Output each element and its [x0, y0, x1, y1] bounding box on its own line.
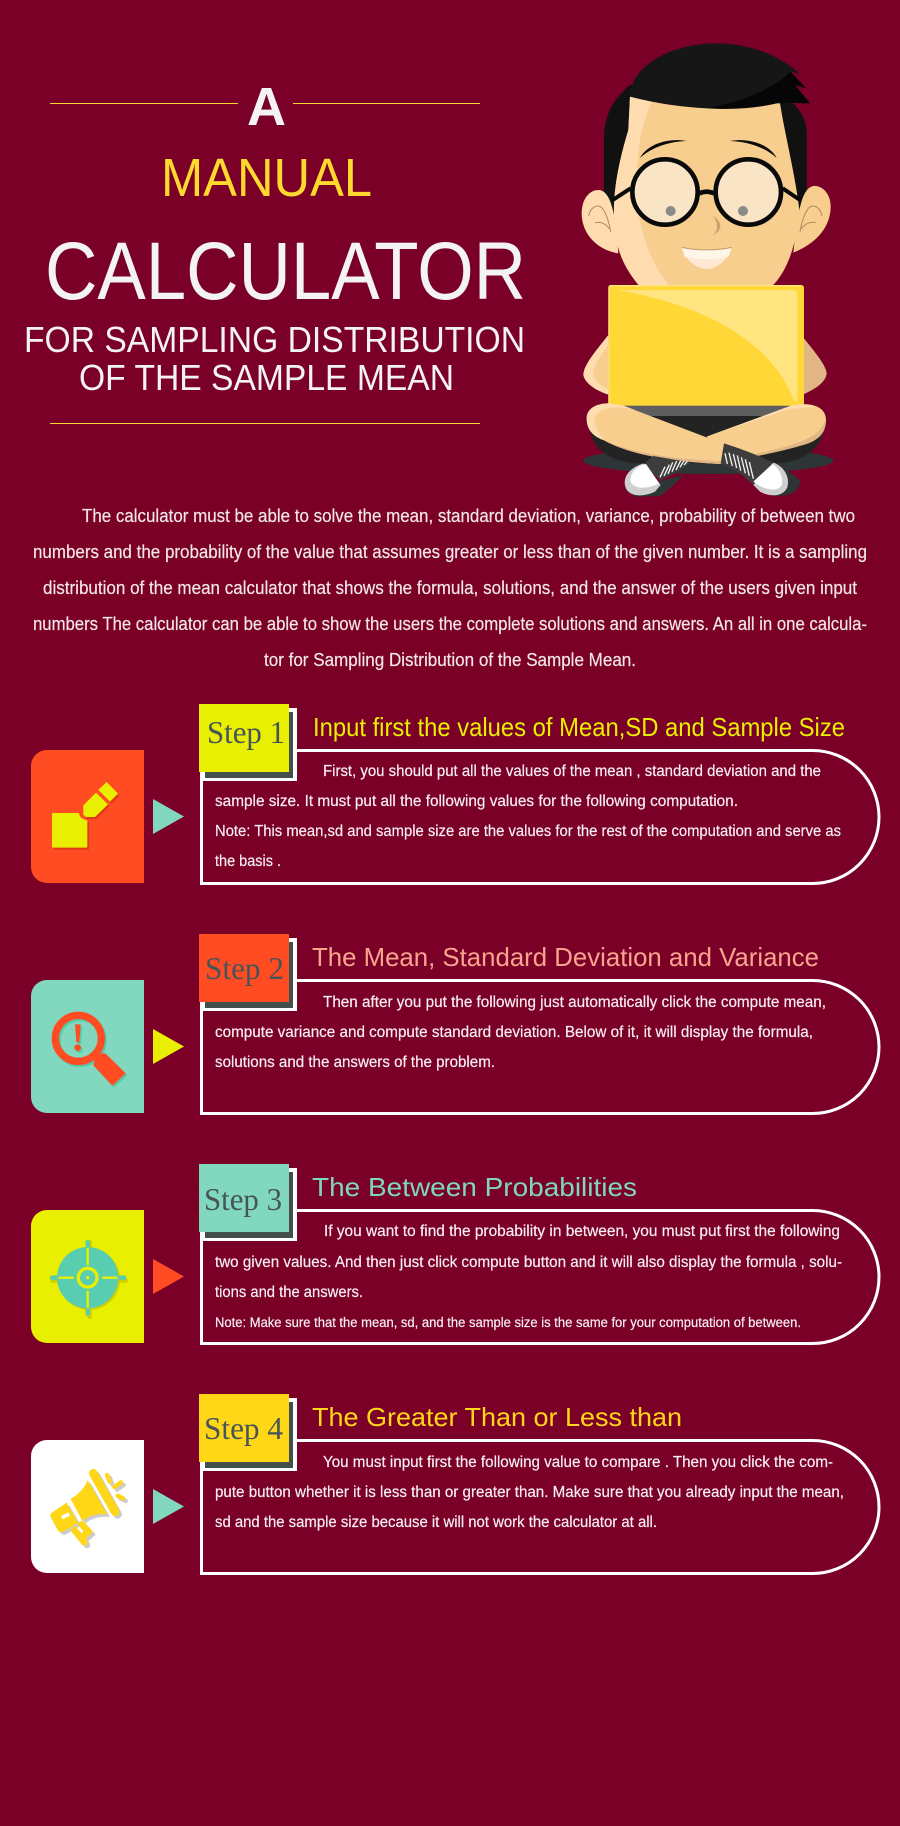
step 1 body text: the basis . — [215, 853, 281, 870]
intro paragraph — [33, 506, 867, 670]
arrow — [153, 799, 184, 834]
intro paragraph: numbers and the probability of the value that assumes greater or less than of the given number. It is a sampling — [33, 542, 867, 562]
step 2 heading: The Mean, Standard Deviation and Variance — [312, 942, 819, 972]
header title block — [24, 77, 526, 424]
step 3 icon card: target — [31, 1210, 144, 1343]
arrow — [153, 1259, 184, 1294]
text frame — [202, 1440, 879, 1574]
step 3 body text: If you want to find the probability in between, you must put first the following — [324, 1223, 840, 1240]
step 4 panel — [31, 1394, 879, 1574]
arrow — [153, 1489, 184, 1524]
step 4 body text: You must input first the following value to compare . Then you click the com- — [323, 1454, 833, 1471]
step 3 panel — [31, 1164, 879, 1344]
step 1 badge — [199, 704, 289, 772]
step 1 body text: Note: This mean,sd and sample size are the values for the rest of the computation and serve as — [215, 823, 841, 840]
step 1 body text: First, you should put all the values of the mean , standard deviation and the — [323, 763, 821, 780]
step 2 badge — [199, 934, 289, 1002]
step 4 heading: The Greater Than or Less than — [312, 1402, 682, 1432]
step 2 body text: solutions and the answers of the problem. — [215, 1054, 495, 1071]
step 2 body text: compute variance and compute standard deviation. Below of it, it will display the formula, — [215, 1024, 813, 1041]
arrow — [153, 1029, 184, 1064]
intro paragraph: tor for Sampling Distribution of the Sample Mean. — [264, 650, 636, 670]
step 1 heading: Input first the values of Mean,SD and Sample Size — [313, 712, 845, 742]
step 4 badge: Step 4 — [204, 1410, 283, 1446]
step 3 badge: Step 3 — [204, 1181, 282, 1217]
intro paragraph: distribution of the mean calculator that shows the formula, solutions, and the answer of the users given input — [43, 578, 857, 598]
title: MANUAL: MANUAL — [161, 148, 372, 208]
text frame — [202, 980, 879, 1114]
character: boy with glasses and laptop — [582, 43, 833, 497]
title: A: A — [247, 77, 286, 137]
step 2 body text — [215, 994, 826, 1071]
step 3 heading: The Between Probabilities — [312, 1172, 637, 1202]
step 1 panel — [31, 704, 879, 884]
subtitle line 2: OF THE SAMPLE MEAN — [79, 357, 454, 398]
step 4 body text: sd and the sample size because it will not work the calculator at all. — [215, 1514, 657, 1531]
step 2 panel — [31, 934, 879, 1114]
step 4 body text: pute button whether it is less than or greater than. Make sure that you already input the mean, — [215, 1484, 844, 1501]
step 3 badge — [199, 1164, 289, 1232]
text frame — [202, 1210, 879, 1344]
step 2 icon card: magnifier — [31, 980, 144, 1113]
step 3 body text: tions and the answers. — [215, 1284, 363, 1301]
intro paragraph: The calculator must be able to solve the mean, standard deviation, variance, probability of between two — [82, 506, 855, 526]
text frame — [202, 750, 879, 884]
step 1 body text — [215, 763, 841, 870]
step 2 body text: Then after you put the following just automatically click the compute mean, — [323, 994, 826, 1011]
step 1 body text: sample size. It must put all the following values for the following computation. — [215, 793, 738, 810]
step 4 body text — [215, 1454, 844, 1531]
step 3 body text: Note: Make sure that the mean, sd, and the sample size is the same for your computation of between. — [215, 1315, 801, 1330]
subtitle line 1: FOR SAMPLING DISTRIBUTION — [24, 319, 525, 360]
step 1 icon card: pencil — [31, 750, 144, 883]
step 4 badge — [199, 1394, 289, 1462]
step 4 icon card: megaphone — [31, 1440, 144, 1573]
step 3 body text — [215, 1223, 842, 1330]
title: CALCULATOR: CALCULATOR — [45, 226, 526, 317]
step 2 badge: Step 2 — [205, 950, 284, 986]
step 1 badge: Step 1 — [207, 714, 285, 750]
step 3 body text: two given values. And then just click compute button and it will also display the formula , solu- — [215, 1254, 842, 1271]
